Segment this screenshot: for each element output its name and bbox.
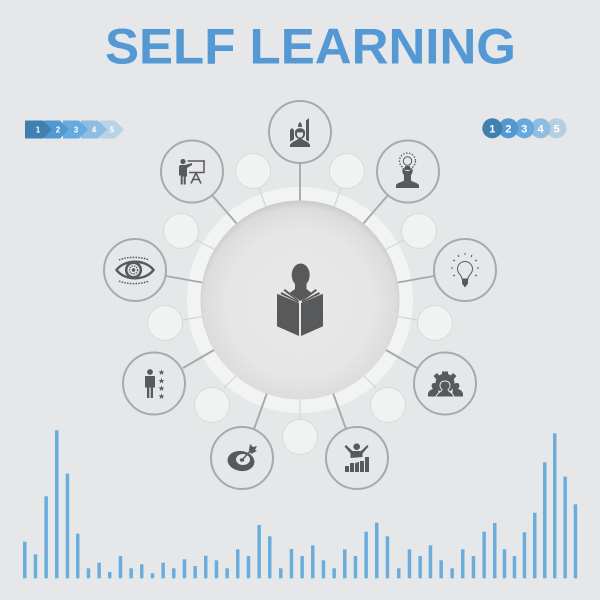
title: SELF LEARNING: [105, 18, 516, 74]
step 3: 3: [521, 123, 527, 135]
circle step legend: [482, 118, 566, 138]
central hub circle: [200, 200, 400, 400]
icon: person over rising chart: [344, 443, 369, 472]
step 2: 2: [56, 126, 61, 134]
icon: team in gear: [428, 372, 463, 397]
outer ring: [187, 187, 413, 413]
step 5: 5: [553, 123, 560, 135]
icon: presenter at board: [179, 159, 205, 184]
connector lines: [166, 162, 434, 429]
arrow step legend: [25, 120, 124, 138]
icon: bulb with pencil: [451, 253, 479, 288]
icon circles: [104, 101, 496, 489]
icon: person with star rating: [145, 368, 165, 401]
icon: head with idea bulb: [396, 153, 419, 188]
step 4: 4: [92, 126, 97, 134]
icon: person with star rating: ★: [158, 376, 165, 386]
bar chart: [23, 430, 577, 578]
thin connector lines: [182, 188, 418, 419]
icon: person with star rating: ★: [158, 392, 165, 401]
step 1: 1: [489, 123, 495, 135]
icon: person with star rating: ★: [158, 384, 165, 393]
icon: reader with book: [277, 264, 323, 336]
icon: eye: [116, 257, 154, 284]
icon: target with arrow: [226, 444, 257, 473]
small empty circles: [148, 154, 452, 454]
icon: thinker with monument: [290, 118, 310, 147]
step 3: 3: [74, 126, 79, 134]
step 5: 5: [110, 126, 115, 134]
step 2: 2: [505, 123, 511, 135]
step 4: 4: [537, 123, 544, 135]
step 1: 1: [36, 126, 41, 134]
icon: person with star rating: ★: [158, 368, 165, 377]
